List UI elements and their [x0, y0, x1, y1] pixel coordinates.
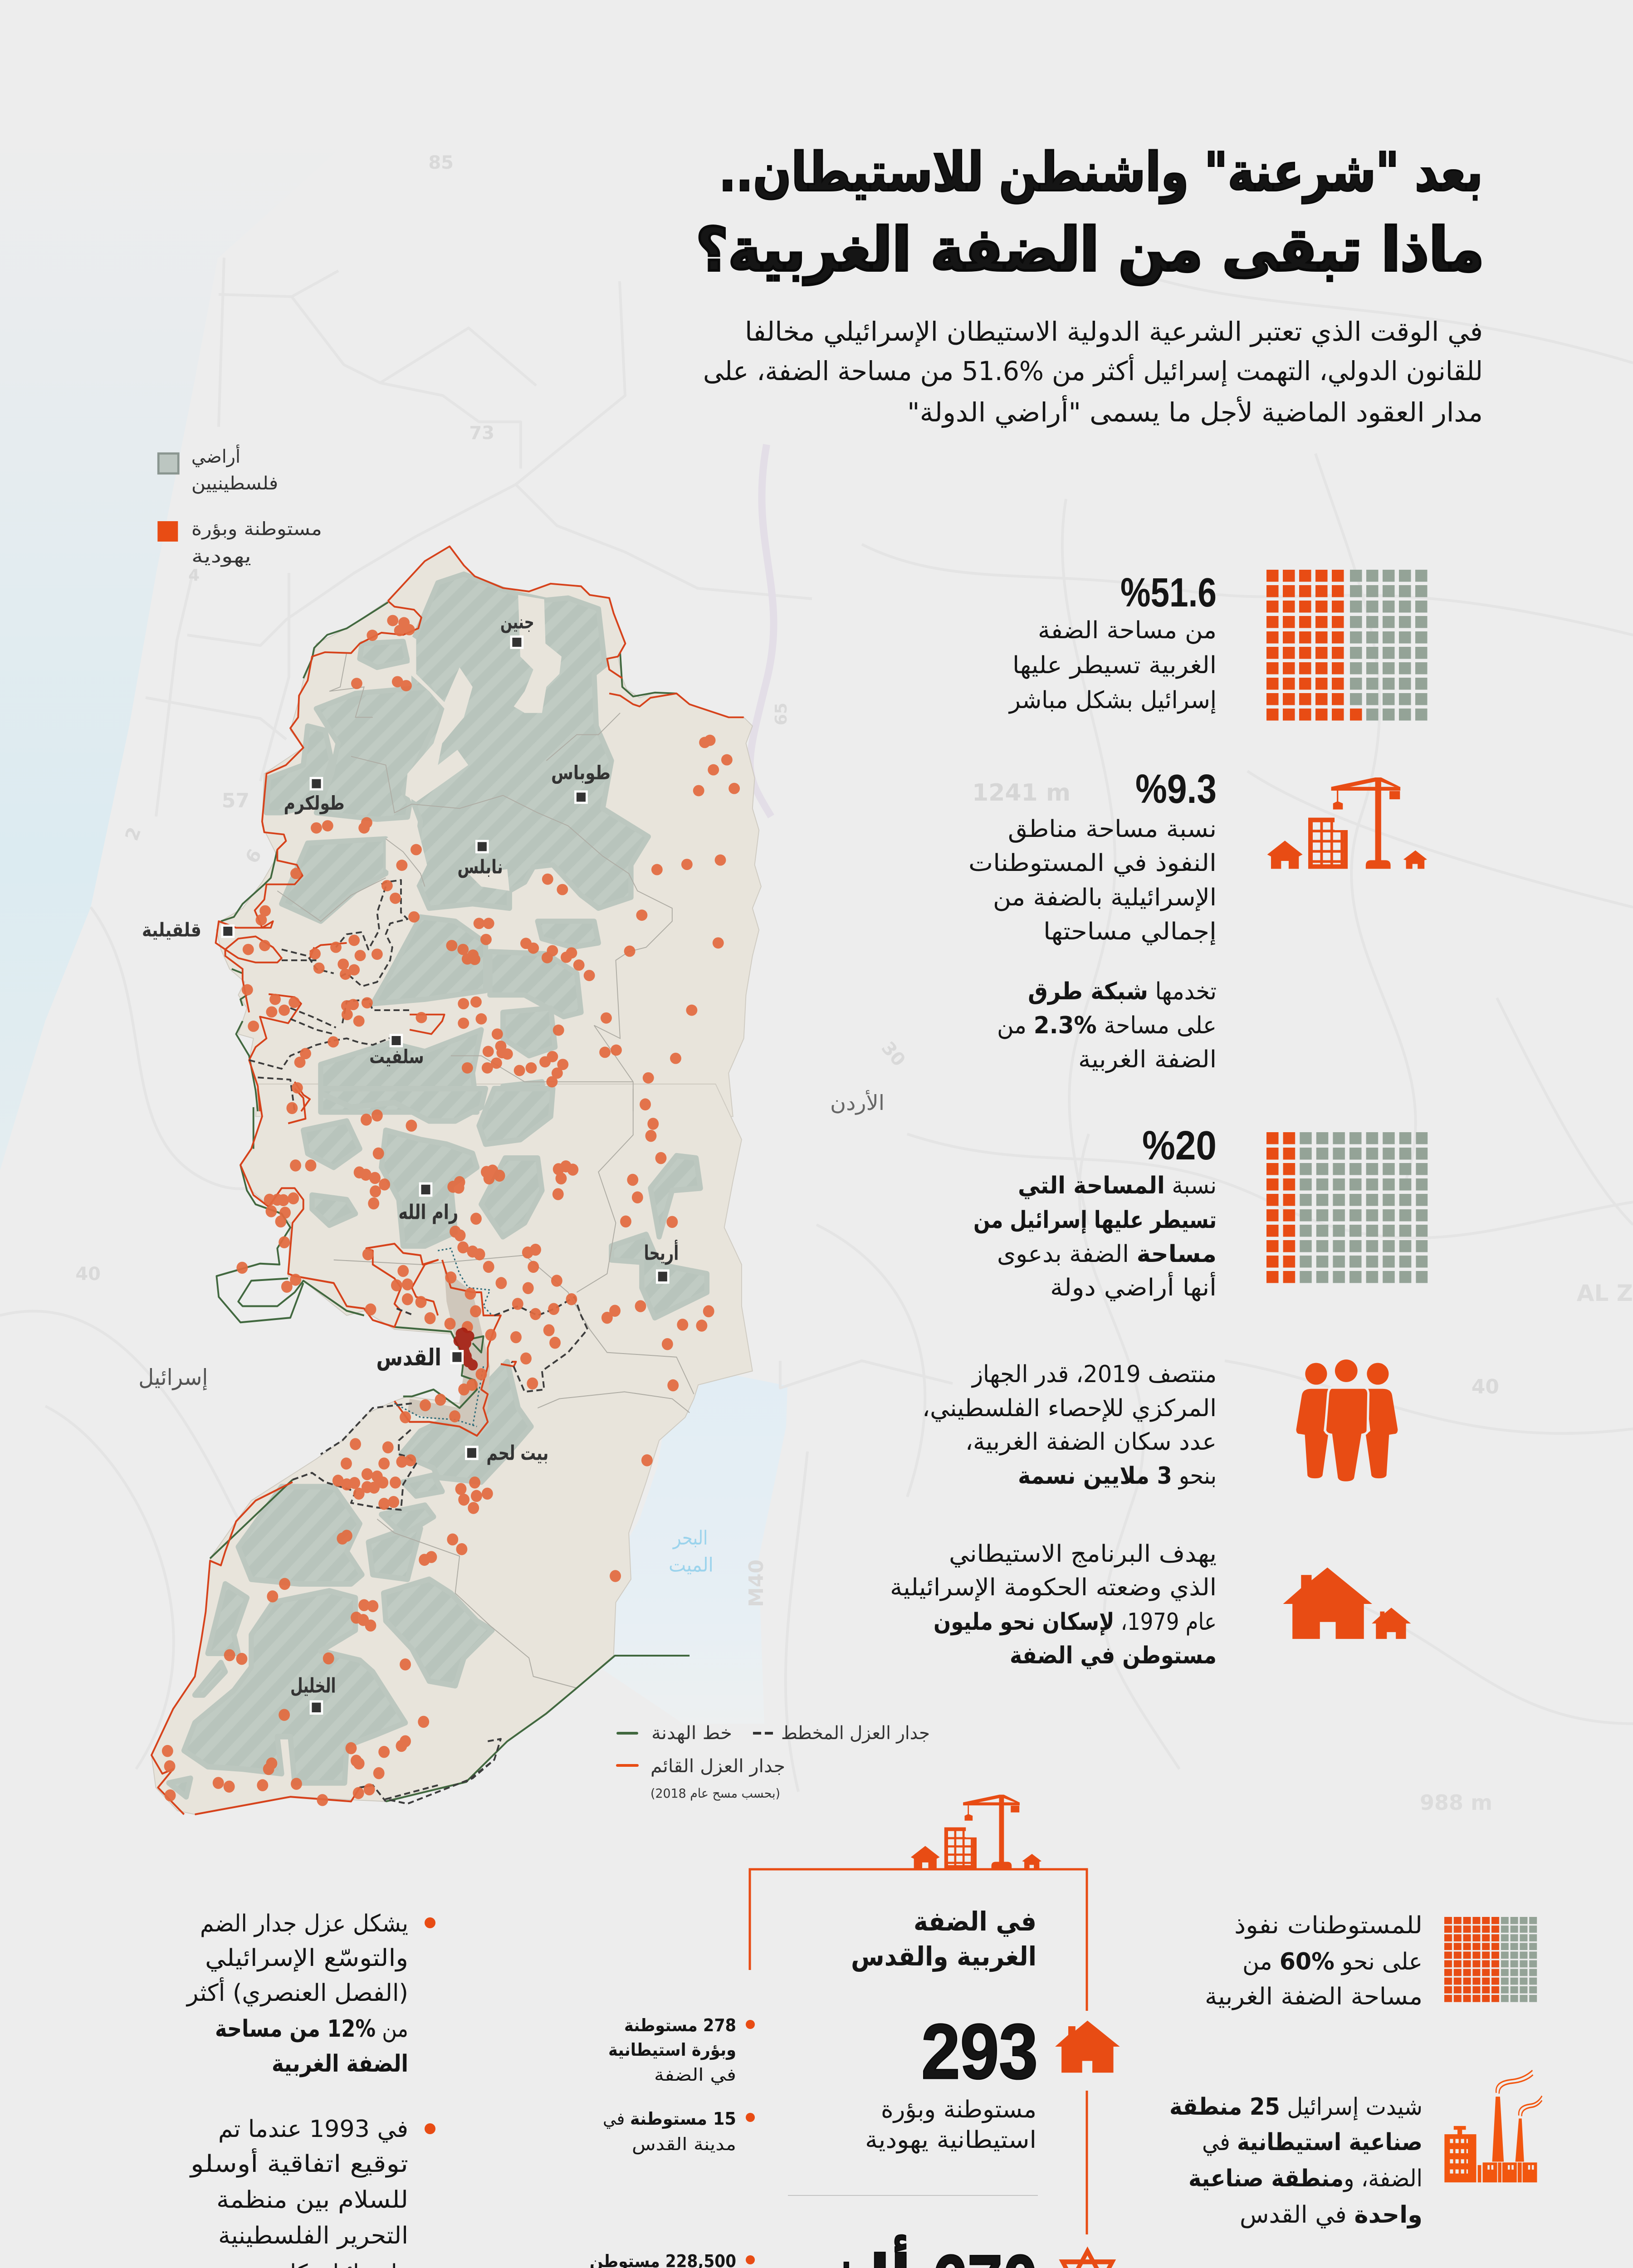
map: Palestinian land areas — [169, 574, 707, 1797]
text: population: بنحو 3 ملايين نسمة — [1018, 1462, 1217, 1490]
divider — [788, 2195, 1038, 2196]
legend: land and settlements: مستوطنة وبؤرة — [191, 519, 322, 540]
stat: 20 percent: تسيطر عليها إسرائيل من — [973, 1207, 1217, 1234]
text: settlements influence: مساحة الضفة الغربية — [1205, 1983, 1423, 2010]
text: settlement program: مستوطن في الضفة — [1010, 1642, 1217, 1669]
stat: 20 percent: أنها أراضي دولة — [1050, 1272, 1217, 1301]
bullets: settlements detail: مدينة القدس — [632, 2134, 736, 2154]
bullets: settlements detail: وبؤرة استيطانية — [608, 2040, 736, 2060]
bullets: settlements detail: 15 مستوطنة في — [603, 2109, 736, 2129]
map: city labels: سلفيت — [369, 1046, 424, 1068]
map: internal boundaries — [277, 652, 694, 1688]
text: population: عدد سكان الضفة الغربية، — [965, 1428, 1217, 1456]
stat: 9.3 percent — [968, 767, 1217, 945]
map background: Dead Sea — [602, 1370, 787, 1724]
bullet text: separation wall: (الفصل العنصري) أكثر — [186, 1977, 408, 2007]
waffle chart: 60 percent — [1444, 1917, 1538, 2002]
map background: sea — [0, 136, 354, 1170]
legend: wall lines: جدار العزل القائم — [650, 1756, 785, 1777]
map: planned wall (dashed) — [249, 880, 587, 1804]
bullets: settlements detail — [603, 2015, 755, 2154]
map: city labels: رام الله — [398, 1201, 458, 1224]
bullet text: 1993 Oslo: توقيع اتفاقية أوسلو — [189, 2148, 408, 2178]
stat: 51.6 percent — [1008, 570, 1217, 714]
stat: 20 percent: نسبة المساحة التي — [1018, 1172, 1217, 1199]
map background: faint road numbers and place labels: 40 — [1472, 1375, 1499, 1398]
legend: wall lines: خط الهدنة — [651, 1723, 732, 1744]
map: city markers — [222, 636, 668, 1714]
bullet text: 1993 Oslo — [182, 2116, 435, 2268]
map: city labels — [138, 611, 885, 1698]
map background: faint road numbers and place labels: 40 — [75, 1264, 101, 1285]
map background: faint road numbers and place labels: 65 — [772, 703, 791, 725]
stat: 20 percent — [973, 1123, 1217, 1301]
stat: 9.3 percent: الإسرائيلية بالضفة من — [993, 884, 1217, 911]
legend: wall lines: جدار العزل المخطط — [781, 1723, 930, 1744]
icon: crane, building and houses — [1267, 777, 1427, 869]
stat: 51.6 percent: إسرائيل بشكل مباشر — [1008, 687, 1217, 714]
icon: factory — [1444, 2070, 1542, 2182]
map background: faint road numbers and place labels: 988 m — [1420, 1790, 1492, 1815]
stat: 9.3 percent: النفوذ في المستوطنات — [968, 850, 1217, 877]
text: industrial zones: واحدة في القدس — [1240, 2201, 1423, 2229]
text: industrial zones — [1169, 2093, 1423, 2229]
map: city labels: جنين — [500, 611, 534, 633]
title: ماذا تبقى من الضفة الغربية؟ — [696, 215, 1484, 285]
text: industrial zones: صناعية استيطانية في — [1202, 2129, 1423, 2156]
legend: land and settlements: أراضي — [191, 445, 240, 467]
map background: faint road numbers and place labels: 73 — [469, 423, 494, 444]
map background: faint road numbers and place labels: AL Z — [1577, 1280, 1633, 1306]
text: settlement program — [890, 1540, 1217, 1669]
map: city labels: الأردن — [830, 1090, 885, 1115]
text: settlement program: الذي وضعته الحكومة الإسرائيلية — [890, 1574, 1217, 1601]
map: city labels: القدس — [376, 1344, 441, 1371]
stat: 293 settlements: استيطانية يهودية — [865, 2126, 1037, 2154]
text: industrial zones: شيدت إسرائيل 25 منطقة — [1169, 2093, 1423, 2121]
map: city labels: الخليل — [290, 1674, 336, 1698]
map: settlement dots — [167, 621, 734, 1800]
legend: wall lines: (بحسب مسح عام 2018) — [650, 1786, 780, 1801]
waffle chart: 20 percent — [1266, 1132, 1428, 1283]
intro text: في الوقت الذي تعتبر الشرعية الدولية الاستيطان الإسرائيلي مخالفا — [745, 316, 1483, 347]
map background: faint road numbers and place labels: 85 — [428, 152, 454, 173]
map: city labels: طوباس — [551, 762, 611, 784]
map: city labels: إسرائيل — [138, 1365, 208, 1390]
text: industrial zones: الضفة، ومنطقة صناعية — [1188, 2165, 1423, 2192]
heading: West Bank and Jerusalem: الغربية والقدس — [851, 1941, 1037, 1972]
stat: 20 percent: مساحة الضفة بدعوى — [997, 1241, 1217, 1268]
map: city labels: نابلس — [457, 856, 503, 878]
bullet text: separation wall: والتوسّع الإسرائيلي — [205, 1945, 408, 1972]
legend: land and settlements — [157, 445, 322, 567]
bullet text: separation wall: من %12 من مساحة — [215, 2015, 408, 2043]
intro text — [703, 316, 1483, 428]
map background: faint road numbers and place labels: 30 — [877, 1038, 909, 1070]
intro text: مدار العقود الماضية لأجل ما يسمى "أراضي الدولة" — [907, 395, 1483, 428]
title: بعد "شرعنة" واشنطن للاستيطان.. — [719, 141, 1483, 204]
bullet text: separation wall: يشكل عزل جدار الضم — [200, 1910, 408, 1937]
text: road network — [997, 978, 1217, 1073]
text: population — [922, 1361, 1217, 1490]
intro text: للقانون الدولي، التهمت إسرائيل أكثر من %51.6 من مساحة الضفة، على — [703, 354, 1483, 387]
map: existing wall (red) — [152, 546, 744, 1814]
text: population: منتصف 2019، قدر الجهاز — [971, 1361, 1217, 1388]
stat: 51.6 percent: الغربية تسيطر عليها — [1012, 652, 1217, 679]
map background: roads and rivers — [0, 258, 1633, 1792]
map background: faint road numbers and place labels: M40 — [745, 1559, 768, 1607]
text: settlements influence — [1205, 1912, 1423, 2010]
text: population: المركزي للإحصاء الفلسطيني، — [922, 1395, 1217, 1422]
bullet text: separation wall: الضفة الغربية — [272, 2050, 408, 2077]
map: Jerusalem municipal area — [407, 1269, 490, 1433]
map: West Bank settlements and land — [138, 546, 885, 1814]
map: beige gaps within Palestinian land — [386, 595, 562, 891]
icon: star of David — [1063, 2251, 1112, 2268]
map: West Bank territory — [152, 546, 761, 1814]
map background: faint road numbers and place labels — [75, 152, 1633, 1815]
stat: 20 percent: %20 — [1142, 1123, 1217, 1168]
heading: West Bank and Jerusalem: في الضفة — [914, 1906, 1037, 1937]
bullets: settlements detail: 278 مستوطنة — [624, 2015, 736, 2035]
text: settlement program: عام 1979، لإسكان نحو مليون — [934, 1608, 1217, 1636]
map background: faint road numbers and place labels: 6 — [241, 846, 266, 867]
icon: houses — [1283, 1568, 1411, 1639]
stat: 51.6 percent: %51.6 — [1120, 570, 1217, 616]
stat: 9.3 percent: %9.3 — [1135, 767, 1217, 812]
map: Jerusalem settlement cluster — [459, 1333, 473, 1365]
map background: faint road numbers and place labels: 1241 m — [972, 779, 1071, 807]
map: city labels: قلقيلية — [142, 919, 201, 941]
legend: land and settlements: فلسطينيين — [191, 473, 278, 494]
text: settlement program: يهدف البرنامج الاستيطاني — [949, 1540, 1217, 1568]
heading: West Bank and Jerusalem — [851, 1906, 1037, 1972]
map background: faint road numbers and place labels: 57 — [222, 789, 249, 812]
stat: 293 settlements: مستوطنة وبؤرة — [881, 2096, 1037, 2123]
map: city labels: الميت — [669, 1553, 714, 1576]
stat: 293 settlements: 293 — [921, 2008, 1038, 2095]
text: settlements influence: للمستوطنات نفوذ — [1234, 1912, 1423, 1939]
map: Jerusalem boundary (blue dotted) — [395, 1248, 492, 1427]
map background: faint road numbers and place labels: 4 — [188, 566, 200, 585]
text: road network: تخدمها شبكة طرق — [1028, 978, 1217, 1005]
map: city labels: أريحا — [644, 1240, 679, 1265]
icon: house — [1055, 2021, 1120, 2072]
text: road network: على مساحة %2.3 من — [997, 1012, 1217, 1039]
bullet text: separation wall — [186, 1910, 435, 2077]
map: armistice line (green) — [210, 602, 689, 1801]
map: city labels: البحر — [672, 1526, 708, 1549]
stat: 9.3 percent: نسبة مساحة مناطق — [1008, 816, 1217, 843]
map: city labels: بيت لحم — [486, 1442, 548, 1465]
bullet text: 1993 Oslo: للسلام بين منظمة — [216, 2186, 408, 2214]
icon: three people — [1296, 1359, 1398, 1482]
map background: faint road numbers and place labels: 2 — [122, 825, 145, 844]
text: road network: الضفة الغربية — [1078, 1046, 1217, 1073]
legend: wall lines — [616, 1723, 930, 1801]
bullet text: 1993 Oslo: في 1993 عندما تم — [218, 2116, 408, 2143]
icon: crane over bracket — [911, 1795, 1041, 1869]
stat: 51.6 percent: من مساحة الضفة — [1038, 617, 1217, 644]
stat: 293 settlements — [865, 2008, 1038, 2154]
stat: 9.3 percent: إجمالي مساحتها — [1043, 918, 1217, 945]
waffle chart: 51.6 percent — [1266, 570, 1428, 721]
title — [696, 141, 1484, 285]
bullets: settlements detail: في الضفة — [654, 2065, 736, 2085]
map: city labels: طولكرم — [284, 792, 345, 815]
legend: land and settlements: يهودية — [191, 546, 251, 567]
text: settlements influence: على نحو %60 من — [1242, 1948, 1423, 1975]
bullet text: 1993 Oslo: التحرير الفلسطينية — [218, 2222, 408, 2249]
bracket line — [750, 1869, 1087, 2268]
